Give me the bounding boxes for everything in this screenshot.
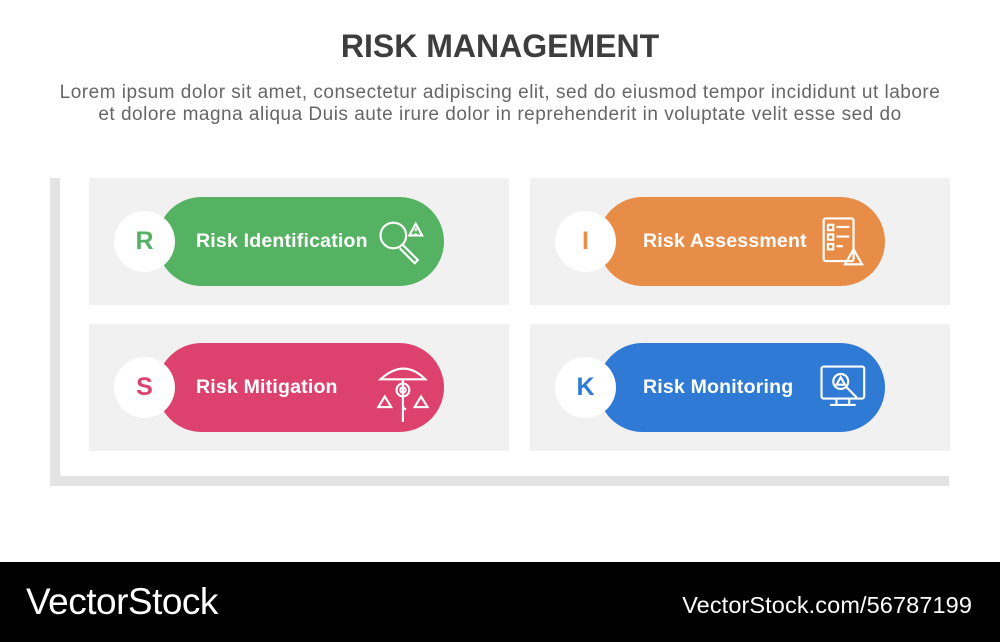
- icon: monitor magnifier: [820, 366, 866, 406]
- panel: risk assessment: [530, 178, 950, 305]
- image id: VectorStock.com/56787199: [682, 592, 972, 618]
- subtitle text: [60, 82, 940, 125]
- icon: checklist warning: [822, 217, 864, 266]
- footer bar: [0, 562, 1000, 642]
- subtitle text: Lorem ipsum dolor sit amet, consectetur adipiscing elit, sed do eiusmod tempor incididunt ut labore: [60, 82, 940, 103]
- subtitle text: et dolore magna aliqua Duis aute irure dolor in reprehenderit in voluptate velit esse sed do: [98, 104, 902, 125]
- icon: umbrella gear: [376, 368, 430, 422]
- panel: risk monitoring: Risk Monitoring: [643, 376, 793, 398]
- brand logo: VectorStock: [26, 581, 218, 622]
- panel: risk assessment: I: [582, 227, 589, 255]
- panel: risk identification: [89, 178, 509, 305]
- icon: magnifier warning: [380, 222, 424, 265]
- panel: risk mitigation: Risk Mitigation: [196, 376, 338, 398]
- panel: risk identification: R: [135, 227, 154, 255]
- panel: risk mitigation: [89, 324, 509, 451]
- panel: risk assessment: Risk Assessment: [643, 230, 807, 252]
- title: RISK MANAGEMENT: [341, 28, 659, 64]
- panel: risk mitigation: S: [136, 373, 153, 401]
- panel: risk identification: Risk Identification: [196, 230, 368, 252]
- panel: risk monitoring: K: [576, 373, 595, 401]
- panel: risk monitoring: [530, 324, 950, 451]
- frame: [50, 178, 949, 486]
